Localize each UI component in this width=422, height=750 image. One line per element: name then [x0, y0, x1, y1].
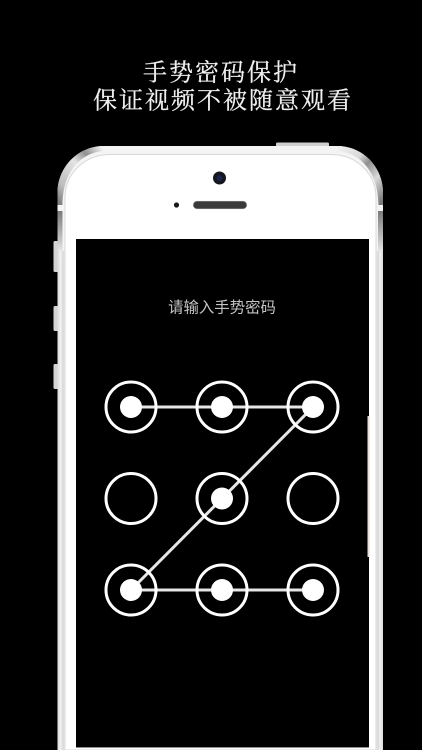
right edge highlight — [368, 416, 370, 557]
prompt text: 请输入手势密码 — [168, 298, 276, 316]
side button: volume down — [54, 364, 58, 389]
title line 2: 保证视频不被随意观看 — [93, 88, 353, 114]
corner metal band: left — [58, 146, 104, 205]
side button: volume up — [54, 306, 58, 331]
title — [93, 60, 353, 114]
phone body outer — [58, 146, 383, 750]
side edge left — [58, 251, 66, 750]
camera — [213, 172, 226, 184]
side edge right — [375, 251, 383, 750]
pattern path — [131, 407, 313, 590]
pattern rings — [106, 382, 338, 615]
metal band lower right — [378, 211, 383, 251]
side button: mute — [54, 241, 58, 272]
screen — [76, 239, 369, 747]
title line 1: 手势密码保护 — [143, 60, 299, 86]
sensor dot — [174, 202, 179, 208]
gesture pattern — [106, 382, 338, 615]
corner metal band: right — [337, 146, 383, 205]
screen bottom edge — [76, 747, 369, 748]
selected dots — [120, 396, 324, 601]
phone mockup — [54, 142, 383, 750]
side button: top — [276, 142, 329, 148]
phone front white face — [65, 154, 376, 750]
metal band lower left — [58, 211, 62, 251]
speaker — [193, 201, 247, 209]
